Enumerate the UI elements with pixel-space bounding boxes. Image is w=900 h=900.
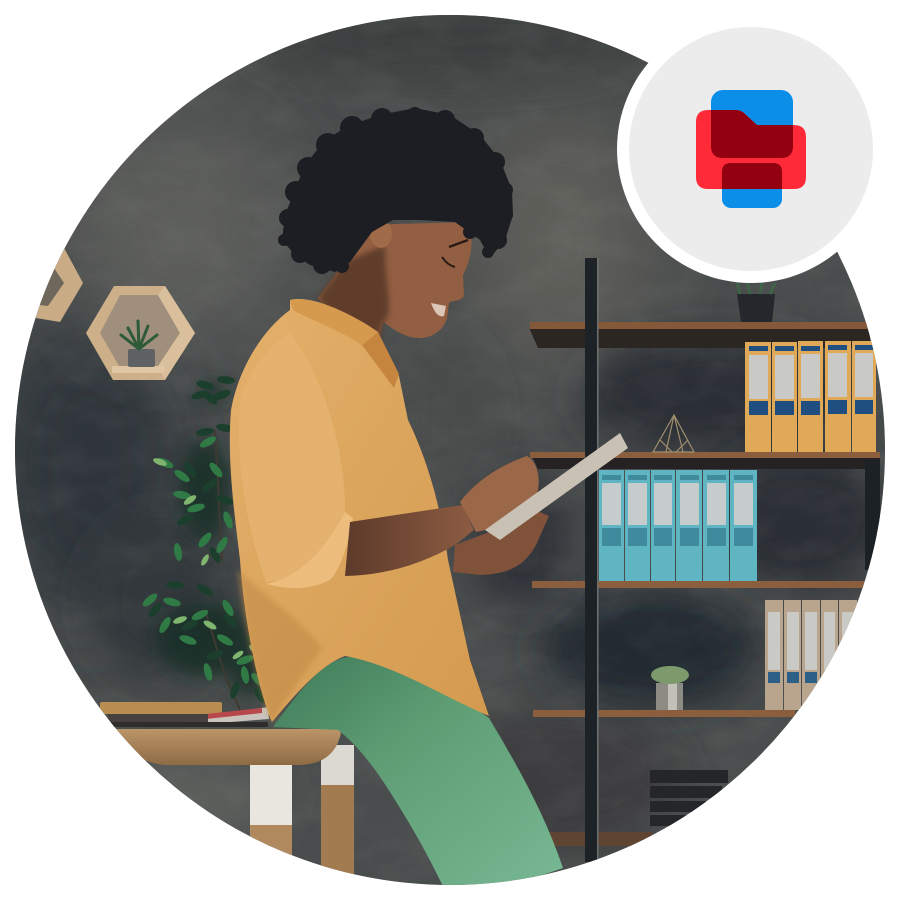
- eyebrow: [449, 240, 468, 247]
- woman: [230, 107, 628, 890]
- blue lower sheet: [722, 163, 782, 208]
- yellow shirt: [230, 299, 489, 722]
- dark red overlap lower: [722, 163, 782, 189]
- wire pyramid ornament: [653, 415, 694, 452]
- shirt shadow fold: [238, 570, 322, 722]
- neck and face: [318, 222, 472, 345]
- small plant: [121, 321, 157, 349]
- green leggings: [273, 657, 563, 890]
- hexagon wall shelf with plant: [86, 286, 195, 380]
- right upright: [865, 460, 880, 570]
- small pot: [128, 349, 155, 367]
- red folder: [696, 110, 806, 189]
- blue upper sheet: [711, 90, 793, 158]
- notebooks: [100, 702, 269, 727]
- neck shadow: [318, 245, 389, 345]
- yellow binders: [745, 341, 876, 452]
- forearm: [345, 505, 474, 576]
- ear: [370, 223, 392, 248]
- sleeve cuff: [266, 512, 353, 588]
- badge: [617, 15, 885, 283]
- smile: [431, 303, 446, 316]
- afro hair: [278, 107, 513, 274]
- icon: folder: [696, 90, 806, 208]
- plant pot top: [737, 282, 775, 322]
- tan binders: [765, 600, 857, 710]
- rolled sleeve: [239, 332, 345, 582]
- badge white ring: [617, 15, 885, 283]
- badge grey disc: [629, 27, 873, 271]
- ficus plant: [141, 375, 268, 710]
- closed eye: [442, 257, 455, 267]
- lower hand: [453, 508, 549, 575]
- succulent in steel pot: [651, 666, 689, 710]
- dark red overlap upper: [711, 110, 793, 158]
- tablet: [485, 433, 628, 540]
- table legs: [250, 745, 354, 875]
- table top: [115, 729, 341, 765]
- collar: [290, 299, 378, 345]
- vertical post: [585, 258, 598, 862]
- dark stacked books: [650, 770, 728, 826]
- bookshelf: [530, 258, 880, 862]
- wooden shelf boards: [530, 322, 880, 846]
- hexagon wall shelf (left, cropped): [36, 248, 83, 322]
- table: [100, 702, 354, 875]
- upper hand: [460, 456, 539, 532]
- teal binders: [599, 470, 757, 581]
